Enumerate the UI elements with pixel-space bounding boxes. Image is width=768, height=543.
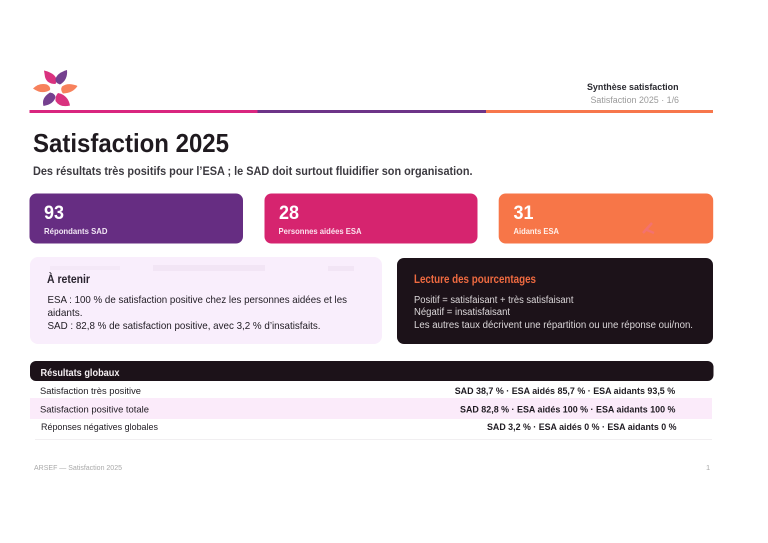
row: satisfaction positive totale xyxy=(30,398,712,419)
text: lecture body: Positif = satisfaisant + très satisfaisant xyxy=(414,295,574,306)
text: lecture body: Les autres taux décrivent une répartition ou une réponse oui/non. xyxy=(414,320,693,331)
panel: à retenir xyxy=(30,257,382,344)
text: lecture body xyxy=(414,295,693,331)
row: réponses négatives globales: Réponses négatives globales xyxy=(41,422,158,433)
title: Satisfaction 2025 xyxy=(33,128,229,158)
stat card: aidants ESA xyxy=(499,194,713,244)
heading: lecture: Lecture des pourcentages xyxy=(414,274,536,286)
text: à retenir body: ESA : 100 % de satisfaction positive chez les personnes aidées et les xyxy=(48,294,347,306)
text: à retenir body: aidants. xyxy=(48,307,82,319)
footer: 1 xyxy=(706,463,710,472)
header label xyxy=(587,82,679,105)
subtitle: Des résultats très positifs pour l’ESA ; le SAD doit surtout fluidifier son organisation. xyxy=(33,164,472,178)
stat card: aidants ESA: Aidants ESA xyxy=(514,226,559,236)
row: réponses négatives globales: SAD 3,2 % · ESA aidés 0 % · ESA aidants 0 % xyxy=(487,422,677,433)
row: satisfaction positive totale: Satisfaction positive totale xyxy=(40,404,149,416)
icon: flower logo xyxy=(33,70,78,106)
stat card: répondants SAD: Répondants SAD xyxy=(44,226,108,236)
table header band: Résultats globaux xyxy=(40,368,120,379)
stat card: aidants ESA: 31 xyxy=(514,202,534,224)
table header band xyxy=(30,361,714,381)
header label: Synthèse satisfaction xyxy=(587,82,679,93)
footer xyxy=(34,463,710,472)
row: satisfaction très positive xyxy=(40,386,676,397)
row: satisfaction très positive: SAD 38,7 % · ESA aidés 85,7 % · ESA aidants 93,5 % xyxy=(455,386,676,397)
header label: Satisfaction 2025 · 1/6 xyxy=(590,95,679,105)
panel: lecture des pourcentages xyxy=(397,258,713,344)
text: à retenir body: SAD : 82,8 % de satisfaction positive, avec 3,2 % d’insatisfaits. xyxy=(48,320,320,332)
stat card: personnes aidées ESA: 28 xyxy=(279,202,299,224)
table: résultats globaux xyxy=(30,361,714,440)
footer: ARSEF — Satisfaction 2025 xyxy=(34,463,122,472)
stat card: personnes aidées ESA: Personnes aidées ESA xyxy=(278,226,362,236)
heading: à retenir: À retenir xyxy=(47,273,90,286)
row: satisfaction très positive: Satisfaction très positive xyxy=(40,386,141,397)
tricolour rule xyxy=(30,110,713,113)
text: à retenir body xyxy=(48,294,347,332)
stat card: personnes aidées ESA xyxy=(264,194,478,244)
stat card: répondants SAD: 93 xyxy=(44,202,64,224)
text: lecture body: Négatif = insatisfaisant xyxy=(414,307,510,318)
stat card: répondants SAD xyxy=(30,194,243,244)
row: satisfaction positive totale: SAD 82,8 % · ESA aidés 100 % · ESA aidants 100 % xyxy=(460,404,676,416)
row: réponses négatives globales xyxy=(41,422,677,433)
